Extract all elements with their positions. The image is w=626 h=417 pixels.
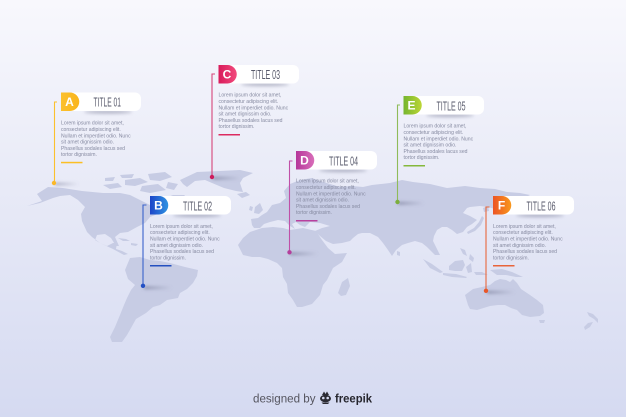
- pill shadow: [84, 110, 132, 114]
- body text: Phasellus sodales lacus sed: [296, 204, 360, 210]
- body text: Lorem ipsum dolor sit amet,: [150, 224, 213, 230]
- body text: [61, 121, 131, 158]
- underline: [218, 134, 240, 136]
- designed by: designed by: [253, 394, 316, 406]
- body text: consectetur adipiscing elit.: [218, 99, 278, 105]
- underline: [493, 265, 514, 266]
- body text: sit amet dignissim odio.: [493, 243, 546, 249]
- freepik credit: [253, 392, 372, 406]
- marker F: [484, 196, 574, 294]
- letter: B: [154, 198, 163, 212]
- pill: [493, 196, 574, 214]
- marker C: [210, 65, 299, 180]
- marker B: [141, 196, 231, 289]
- marker E: [395, 96, 484, 204]
- body text: Lorem ipsum dolor sit amet,: [296, 179, 359, 185]
- body text: consectetur adipiscing elit.: [150, 230, 210, 236]
- pill shadow: [319, 169, 367, 172]
- pill shadow: [173, 214, 221, 217]
- title: TITLE 01: [94, 94, 121, 110]
- uk: [249, 203, 263, 214]
- body text: consectetur adipiscing elit.: [61, 127, 121, 133]
- body text: Phasellus sodales lacus sed: [61, 146, 125, 152]
- body text: Phasellus sodales lacus sed: [218, 118, 283, 124]
- letter: F: [498, 198, 505, 212]
- north america: [27, 187, 185, 255]
- tasmania: [539, 320, 545, 323]
- stem: [212, 74, 215, 177]
- pill shadow: [241, 83, 289, 86]
- letter badge: [61, 92, 79, 111]
- body text: [296, 179, 366, 216]
- dot: [395, 200, 400, 204]
- eurasia: [251, 178, 530, 256]
- body text: tortor dignissim.: [218, 124, 254, 130]
- marker A: [52, 92, 141, 185]
- dot shadow: [55, 183, 79, 185]
- south america: [110, 257, 198, 342]
- dot shadow: [144, 286, 172, 289]
- body text: tortor dignissim.: [61, 152, 97, 158]
- body text: Nullam et imperdiet odio. Nunc: [296, 191, 366, 197]
- body text: Lorem ipsum dolor sit amet,: [218, 93, 281, 99]
- body text: [404, 124, 474, 161]
- africa: [238, 227, 347, 307]
- new zealand: [584, 312, 598, 330]
- dot shadow: [290, 252, 318, 255]
- world map: [27, 170, 598, 342]
- letter: D: [300, 154, 309, 168]
- southeast asia islands: [423, 248, 523, 278]
- body text: Lorem ipsum dolor sit amet,: [61, 121, 124, 127]
- letter: A: [65, 95, 74, 109]
- sri lanka: [397, 251, 400, 256]
- australia: [465, 279, 544, 317]
- letter badge: [296, 151, 314, 170]
- body text: tortor dignissim.: [493, 255, 529, 261]
- stem: [290, 161, 292, 252]
- body text: Nullam et imperdiet odio. Nunc: [218, 105, 289, 111]
- title: TITLE 03: [251, 67, 280, 82]
- underline: [404, 165, 425, 166]
- dot: [287, 250, 292, 254]
- greenland: [180, 170, 253, 192]
- pill shadow: [516, 214, 564, 217]
- dot shadow: [487, 291, 515, 294]
- body text: sit amet dignissim odio.: [218, 112, 271, 118]
- body text: [218, 93, 289, 130]
- body text: consectetur adipiscing elit.: [493, 230, 553, 236]
- body text: sit amet dignissim odio.: [61, 140, 114, 146]
- body text: Phasellus sodales lacus sed: [150, 249, 214, 255]
- body text: Nullam et imperdiet odio. Nunc: [493, 236, 563, 242]
- stem: [143, 205, 146, 286]
- body text: Nullam et imperdiet odio. Nunc: [150, 236, 220, 242]
- body text: sit amet dignissim odio.: [404, 143, 456, 149]
- dot: [484, 289, 488, 293]
- underline: [296, 220, 318, 222]
- body text: consectetur adipiscing elit.: [404, 130, 463, 136]
- letter badge: [150, 196, 168, 214]
- dot shadow: [398, 202, 424, 204]
- stem: [398, 105, 400, 202]
- body text: Lorem ipsum dolor sit amet,: [493, 224, 556, 230]
- body text: Nullam et imperdiet odio. Nunc: [404, 136, 474, 142]
- title: TITLE 02: [183, 198, 212, 214]
- pill: [296, 151, 377, 170]
- letter badge: [493, 196, 511, 214]
- madagascar: [338, 278, 350, 296]
- stem: [486, 207, 490, 291]
- body text: consectetur adipiscing elit.: [296, 185, 356, 191]
- pill: [61, 92, 141, 111]
- letter badge: [218, 65, 237, 84]
- body text: sit amet dignissim odio.: [296, 198, 349, 204]
- letter badge: [404, 96, 422, 114]
- body text: tortor dignissim.: [296, 210, 332, 216]
- title: TITLE 04: [329, 154, 358, 168]
- title: TITLE 06: [526, 198, 556, 214]
- dot: [210, 175, 214, 179]
- letter: E: [407, 98, 416, 112]
- underline: [150, 265, 172, 266]
- body text: Nullam et imperdiet odio. Nunc: [61, 133, 131, 139]
- pill shadow: [426, 114, 474, 117]
- body text: Phasellus sodales lacus sed: [493, 249, 557, 255]
- body text: [150, 224, 220, 261]
- japan: [467, 206, 489, 234]
- icon: freepik mascot: [320, 392, 331, 404]
- body text: tortor dignissim.: [150, 255, 186, 261]
- canadian arctic islands: [103, 172, 178, 193]
- body text: Phasellus sodales lacus sed: [404, 149, 468, 155]
- body text: tortor dignissim.: [404, 155, 439, 161]
- underline: [61, 162, 82, 163]
- dot shadow: [213, 177, 241, 180]
- body text: [493, 224, 563, 261]
- iceland: [237, 192, 250, 198]
- pill: [150, 196, 231, 214]
- marker D: [287, 151, 377, 255]
- pill: [218, 65, 299, 84]
- body text: sit amet dignissim odio.: [150, 243, 203, 249]
- letter: C: [223, 68, 232, 82]
- freepik wordmark: freepik: [335, 392, 372, 406]
- title: TITLE 05: [436, 98, 466, 114]
- dot: [141, 284, 145, 288]
- body text: Lorem ipsum dolor sit amet,: [404, 124, 466, 130]
- stem: [54, 102, 57, 183]
- caribbean: [118, 238, 138, 246]
- dot: [52, 181, 56, 185]
- pill: [404, 96, 484, 114]
